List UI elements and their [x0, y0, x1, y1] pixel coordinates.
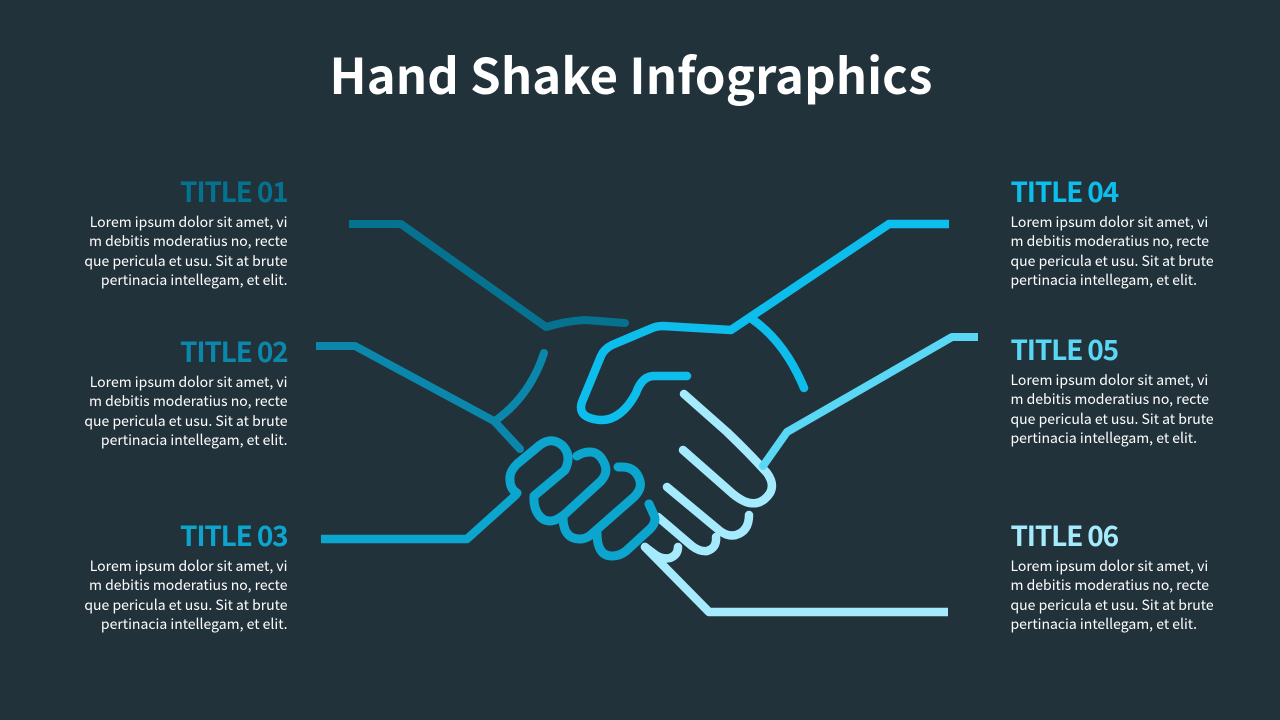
text block: title 06: Lorem ipsum dolor sit amet, vi [1010, 556, 1208, 576]
text block: title 03: que pericula et usu. Sit at brute [84, 595, 288, 615]
text block: title 04: TITLE 04 [1010, 171, 1118, 211]
hand segment 06: palest fingers and lower arm [641, 394, 948, 612]
text block: title 05 [1010, 329, 1214, 448]
text block: title 04: Lorem ipsum dolor sit amet, vi [1010, 212, 1208, 232]
text block: title 03 [84, 515, 288, 634]
text block: title 06: pertinacia intellegam, et elit. [1010, 614, 1197, 634]
text block: title 01: que pericula et usu. Sit at brute [84, 251, 288, 271]
text block: title 04 [1010, 171, 1214, 290]
text block: title 02: TITLE 02 [180, 331, 288, 371]
text block: title 04: pertinacia intellegam, et elit. [1010, 270, 1197, 290]
text block: title 01: Lorem ipsum dolor sit amet, vi [90, 212, 288, 232]
text block: title 05: pertinacia intellegam, et elit. [1010, 428, 1197, 448]
text block: title 06: m debitis moderatius no, recte [1010, 575, 1209, 595]
text block: title 02 [84, 331, 288, 450]
text block: title 01 [84, 171, 288, 290]
text block: title 03: Lorem ipsum dolor sit amet, vi [90, 556, 288, 576]
text block: title 05: que pericula et usu. Sit at brute [1010, 409, 1214, 429]
text block: title 03: TITLE 03 [180, 515, 288, 555]
text block: title 03: pertinacia intellegam, et elit. [101, 614, 288, 634]
hand segment 03: lower left arm and fist [321, 441, 655, 556]
hand segment 05: upper right lower arm [759, 337, 978, 470]
text block: title 03: m debitis moderatius no, recte [89, 575, 288, 595]
text block: title 05: TITLE 05 [1010, 329, 1118, 369]
title: Hand Shake Infographics [330, 38, 932, 109]
hand segment 04: top right arm and thumb [581, 224, 949, 420]
text block: title 02: Lorem ipsum dolor sit amet, vi [90, 372, 288, 392]
text block: title 01: pertinacia intellegam, et elit. [101, 270, 288, 290]
text block: title 05: m debitis moderatius no, recte [1010, 389, 1209, 409]
text block: title 06: TITLE 06 [1010, 515, 1118, 555]
text block: title 04: que pericula et usu. Sit at brute [1010, 251, 1214, 271]
text block: title 01: TITLE 01 [180, 171, 288, 211]
text block: title 02: que pericula et usu. Sit at brute [84, 411, 288, 431]
text block: title 02: m debitis moderatius no, recte [89, 391, 288, 411]
text block: title 04: m debitis moderatius no, recte [1010, 231, 1209, 251]
text block: title 06: que pericula et usu. Sit at brute [1010, 595, 1214, 615]
hand segment 01: top left arm [349, 224, 629, 327]
hand segment 02: middle left arm [316, 346, 544, 453]
text block: title 02: pertinacia intellegam, et elit. [101, 430, 288, 450]
text block: title 05: Lorem ipsum dolor sit amet, vi [1010, 370, 1208, 390]
text block: title 06 [1010, 515, 1214, 634]
text block: title 01: m debitis moderatius no, recte [89, 231, 288, 251]
